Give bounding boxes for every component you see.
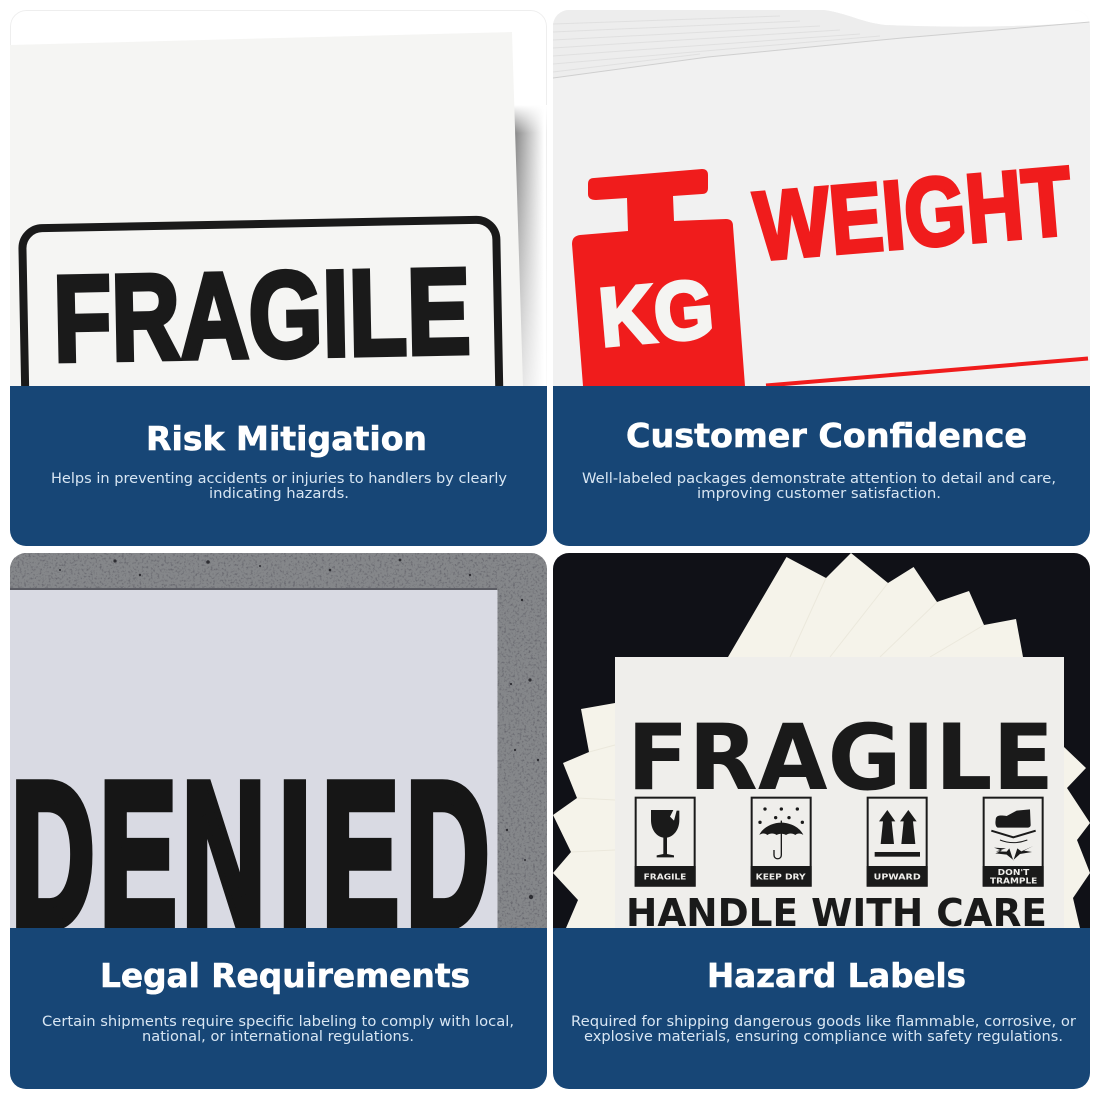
caption band — [553, 386, 1090, 546]
icon: do not trample: TRAMPLE — [990, 876, 1038, 886]
description — [571, 1014, 1076, 1045]
description: Certain shipments require specific labeling to comply with local, — [42, 1014, 514, 1030]
panel: risk mitigation — [10, 10, 548, 546]
paper shadow — [514, 105, 548, 386]
heading: Customer Confidence — [626, 416, 1027, 455]
heading: Legal Requirements — [100, 956, 470, 995]
icon: broken glass: FRAGILE — [644, 872, 687, 882]
icon: upward arrows — [867, 798, 928, 887]
description — [42, 1014, 514, 1045]
FRAGILE heading on card: FRAGILE — [627, 706, 1054, 811]
description: national, or international regulations. — [142, 1029, 414, 1045]
icon: keep dry umbrella: KEEP DRY — [756, 872, 807, 882]
description: Helps in preventing accidents or injuries to handlers by clearly — [51, 471, 507, 487]
icon: do not trample — [983, 798, 1044, 887]
caption band — [10, 386, 547, 546]
hazard icons — [635, 798, 1044, 887]
description — [51, 471, 507, 502]
paper sheet — [10, 588, 498, 928]
description: Required for shipping dangerous goods like flammable, corrosive, or — [571, 1014, 1076, 1030]
denied text: DENIED — [11, 741, 489, 970]
description: Well-labeled packages demonstrate attention to detail and care, — [582, 471, 1056, 487]
icon: upward arrows: UPWARD — [874, 872, 921, 882]
fragile sign: FRAGILE — [52, 243, 472, 387]
panel: legal requirements — [10, 553, 547, 1089]
caption band — [10, 928, 547, 1089]
heading: Risk Mitigation — [146, 419, 427, 458]
fanned sheets — [553, 553, 1090, 928]
front card — [615, 657, 1064, 928]
description — [582, 471, 1056, 502]
paper stack edge — [553, 10, 1090, 78]
description: explosive materials, ensuring compliance with safety regulations. — [584, 1029, 1063, 1045]
description: indicating hazards. — [209, 486, 349, 502]
red rule — [766, 358, 1088, 386]
weight icon — [572, 169, 745, 386]
panel: hazard labels — [553, 553, 1090, 1089]
icon: do not trample: DON'T — [998, 867, 1030, 877]
fragile sign — [18, 216, 504, 386]
KG: KG — [596, 263, 717, 364]
heading: Hazard Labels — [707, 956, 966, 995]
description: improving customer satisfaction. — [697, 486, 941, 502]
icon: keep dry umbrella — [751, 798, 812, 887]
caption band — [553, 928, 1090, 1089]
panel: customer confidence — [553, 10, 1090, 546]
handle with care text: HANDLE WITH CARE — [626, 891, 1047, 935]
white backdrop top right — [824, 10, 1090, 27]
concrete background — [10, 553, 547, 928]
paper sheet — [10, 32, 523, 386]
icon: broken glass — [635, 798, 696, 887]
